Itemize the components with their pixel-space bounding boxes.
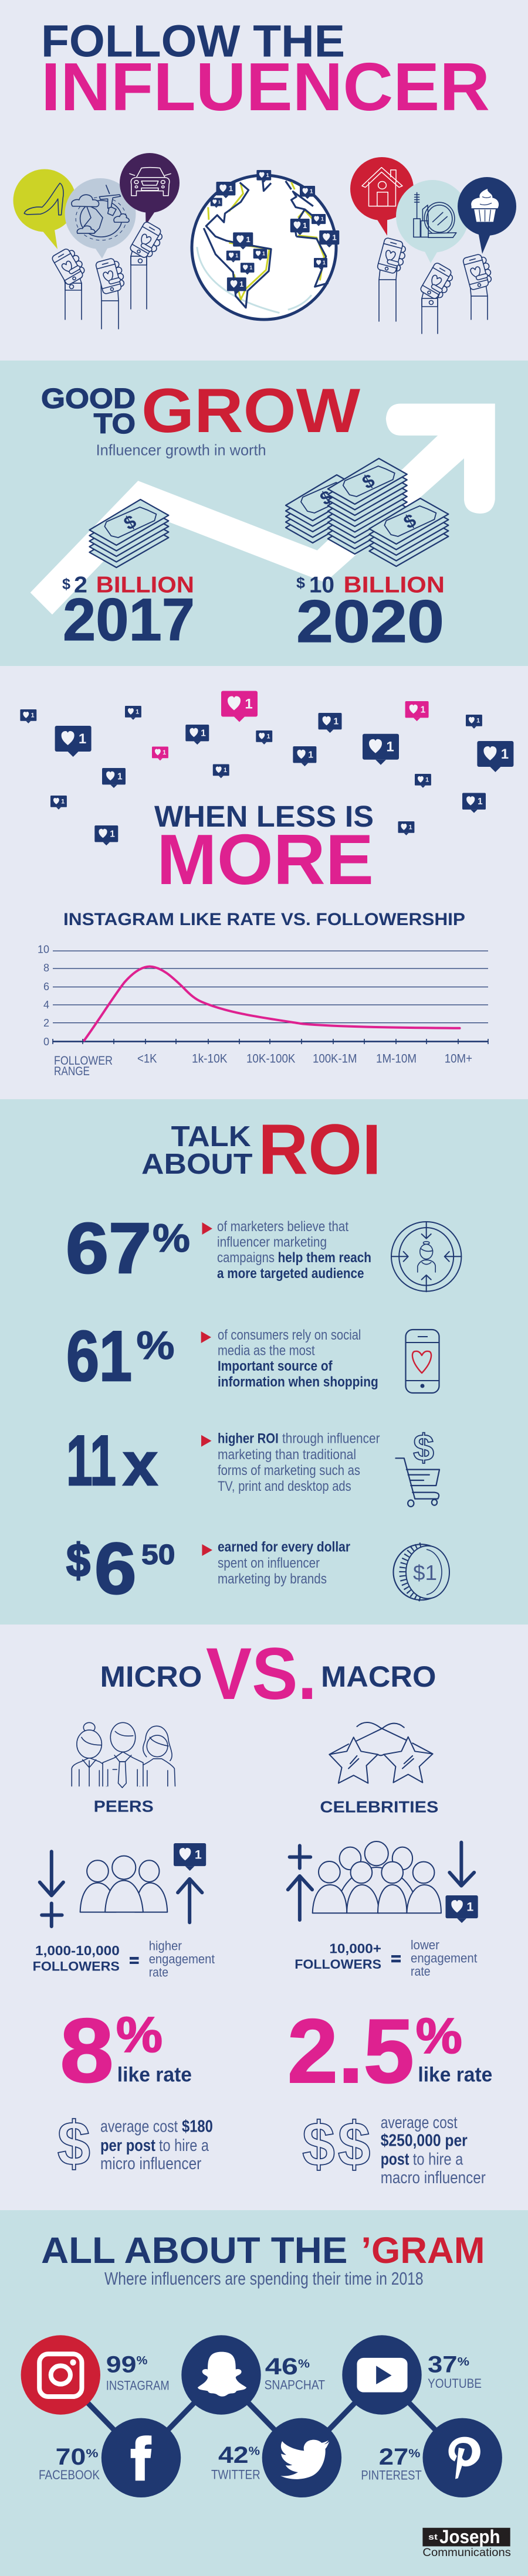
stat: pinterest: PINTEREST bbox=[361, 2468, 422, 2483]
like badge: 1 bbox=[266, 172, 270, 179]
stat: $6.50 bbox=[66, 1528, 350, 1609]
stat: 2020: BILLION bbox=[344, 573, 445, 598]
title bbox=[41, 16, 490, 125]
line chart bbox=[38, 943, 488, 1078]
like badge bbox=[415, 774, 431, 788]
icon: dollar signs: $ bbox=[302, 2109, 335, 2179]
hand 2 bbox=[95, 257, 127, 329]
like badge: 1 bbox=[249, 265, 252, 271]
heading: all about the gram: ALL ABOUT THE bbox=[41, 2230, 347, 2271]
like badge: 1 bbox=[117, 772, 123, 781]
like badge bbox=[241, 263, 254, 274]
like badge: 1 bbox=[310, 189, 313, 195]
like badge bbox=[256, 170, 271, 182]
chart title: INSTAGRAM LIKE RATE VS. FOLLOWERSHIP bbox=[63, 910, 465, 929]
icon: macro crowd bbox=[288, 1841, 478, 1923]
icon: youtube bbox=[342, 2335, 422, 2415]
panel: good to grow bbox=[31, 375, 495, 655]
like badge: 1 bbox=[266, 733, 270, 740]
heading: all about the gram bbox=[41, 2230, 485, 2271]
stat: 61%: Important source of bbox=[218, 1358, 333, 1374]
title: INFLUENCER bbox=[41, 49, 490, 125]
icon: peers bbox=[72, 1722, 175, 1787]
stat: $6.50: 50 bbox=[141, 1540, 175, 1571]
heading: talk about ROI: TALK bbox=[171, 1121, 251, 1153]
like badge bbox=[312, 214, 326, 226]
stat: 67% bbox=[66, 1208, 371, 1288]
money stack right bbox=[369, 498, 448, 566]
stat: macro followers bbox=[295, 1938, 477, 1979]
hand 3 bbox=[129, 221, 166, 309]
floating like badges bbox=[20, 691, 513, 845]
stat: micro followers: 1,000-10,000 bbox=[35, 1943, 120, 1958]
stat: instagram: % bbox=[136, 2354, 148, 2367]
icon: twitter bbox=[262, 2418, 341, 2497]
like badge bbox=[319, 230, 339, 247]
like badge bbox=[398, 821, 414, 835]
stat: 61% bbox=[66, 1316, 378, 1396]
like badge bbox=[227, 277, 246, 294]
bubble: makeup bbox=[396, 180, 469, 263]
stat: 61%: of consumers rely on social bbox=[218, 1327, 361, 1343]
like badge bbox=[226, 251, 240, 263]
money stack centre bbox=[328, 458, 407, 554]
like badge pink bbox=[405, 701, 429, 721]
like badge pink: 1 bbox=[163, 749, 166, 756]
stat: macro followers: FOLLOWERS bbox=[295, 1957, 381, 1972]
like badge: 1 bbox=[332, 233, 337, 242]
cost: micro: average cost bbox=[100, 2118, 178, 2136]
stat: 11x: higher ROI bbox=[218, 1431, 279, 1447]
stat: 67%: of marketers believe that bbox=[217, 1219, 348, 1235]
stat: twitter: % bbox=[249, 2445, 260, 2458]
y axis labels: 4 bbox=[43, 999, 49, 1011]
stat: 11x: x bbox=[123, 1430, 158, 1498]
like badge: 1 bbox=[110, 829, 115, 839]
x axis labels: RANGE bbox=[54, 1065, 90, 1078]
stat: 11x: forms of marketing such as bbox=[218, 1463, 360, 1479]
stat: micro followers: FOLLOWERS bbox=[33, 1959, 120, 1974]
globe like badges bbox=[211, 170, 339, 294]
stat: 8% like rate bbox=[60, 2000, 192, 2101]
stat: $6.50: spent on influencer bbox=[218, 1555, 320, 1571]
like badge bbox=[94, 825, 118, 845]
stat: youtube: % bbox=[458, 2356, 469, 2368]
stat: 2017: 2 bbox=[74, 573, 87, 598]
icon: dollar coin: $1 bbox=[413, 1561, 437, 1585]
like badge bbox=[446, 1895, 478, 1923]
money stack 2017 bbox=[89, 499, 168, 567]
stat: pinterest: 27 bbox=[379, 2444, 408, 2470]
stat: 8% like rate: like rate bbox=[117, 2064, 192, 2086]
y axis labels: 0 bbox=[43, 1036, 49, 1048]
stat: 2020: $ bbox=[296, 574, 306, 592]
cost: macro: macro influencer bbox=[381, 2169, 486, 2187]
logo: st joseph communications bbox=[422, 2526, 511, 2559]
money stack centre: $ bbox=[358, 470, 378, 493]
stat: $6.50: marketing by brands bbox=[218, 1571, 327, 1587]
panel: talk about ROI bbox=[66, 1110, 461, 1609]
stat: instagram: 99 bbox=[106, 2352, 136, 2378]
like badge: 1 bbox=[79, 731, 86, 747]
icon: dollar sign: $ bbox=[57, 2108, 90, 2179]
like badge bbox=[363, 734, 399, 765]
title: FOLLOW THE bbox=[41, 16, 345, 67]
stat: $6.50: earned for every dollar bbox=[218, 1540, 350, 1555]
stat: 2020: 2020 bbox=[296, 588, 444, 655]
y axis labels: 6 bbox=[43, 981, 49, 993]
network connectors bbox=[60, 2375, 462, 2458]
like badge bbox=[253, 249, 267, 260]
stat: 11x: marketing than traditional bbox=[218, 1447, 356, 1463]
heading: good to grow: GROW bbox=[141, 375, 360, 446]
stat: snapchat: SNAPCHAT bbox=[265, 2378, 325, 2393]
stat: micro followers: higher bbox=[149, 1939, 182, 1953]
stat: 2.5% like rate: % bbox=[416, 2009, 462, 2064]
panel: when less is more bbox=[20, 691, 513, 1078]
like badge: 1 bbox=[386, 739, 394, 755]
like badge bbox=[318, 713, 341, 733]
icon: facebook bbox=[101, 2418, 181, 2497]
like badge: 1 bbox=[262, 251, 265, 257]
y axis labels: 8 bbox=[43, 962, 49, 974]
label: peers: PEERS bbox=[94, 1797, 154, 1816]
like badge: 1 bbox=[303, 221, 307, 230]
like badge pink bbox=[221, 691, 258, 722]
money stack right: $ bbox=[400, 509, 419, 533]
logo: st joseph communications: st bbox=[428, 2532, 438, 2541]
icon: celebrities bbox=[329, 1722, 433, 1783]
like badge: 1 bbox=[201, 728, 206, 738]
label: celebrities: CELEBRITIES bbox=[320, 1798, 438, 1816]
icon: snapchat bbox=[181, 2335, 261, 2415]
cost: micro bbox=[57, 2108, 213, 2179]
stat: pinterest bbox=[361, 2444, 422, 2483]
stat: 8% like rate: % bbox=[116, 2007, 163, 2063]
stat: facebook: 70 bbox=[56, 2444, 86, 2470]
stat: 8% like rate: 8 bbox=[60, 2000, 114, 2101]
growth arrow bbox=[31, 403, 495, 614]
stat: facebook bbox=[39, 2444, 100, 2482]
x axis labels: 1M-10M bbox=[376, 1052, 417, 1066]
like badge: 1 bbox=[239, 280, 243, 288]
speech bubbles bbox=[13, 153, 516, 263]
stat: twitter bbox=[211, 2442, 260, 2482]
stat: macro followers: rate bbox=[411, 1964, 431, 1979]
stat: youtube: YOUTUBE bbox=[428, 2376, 482, 2391]
stat: 11x: 11 bbox=[66, 1420, 116, 1500]
like badge: 1 bbox=[323, 260, 326, 266]
icon: dollar signs: $ bbox=[338, 2109, 371, 2179]
money stack back bbox=[286, 475, 365, 543]
x axis labels: 10K-100K bbox=[246, 1052, 295, 1066]
like badge bbox=[50, 796, 67, 810]
hands holding phones bbox=[51, 221, 494, 334]
stat: 2.5% like rate: 2.5 bbox=[287, 2000, 414, 2102]
stat: 61%: % bbox=[136, 1323, 175, 1368]
stat: 67%: campaigns bbox=[217, 1250, 275, 1266]
hand 1 bbox=[51, 246, 88, 320]
cost: macro: to hire a bbox=[413, 2150, 463, 2169]
like badge bbox=[462, 793, 486, 813]
stat: macro followers: engagement bbox=[411, 1950, 477, 1965]
stat: youtube bbox=[428, 2352, 482, 2391]
logo: st joseph communications: Joseph bbox=[439, 2526, 500, 2547]
like badge pink: 1 bbox=[421, 705, 426, 715]
heading: micro vs macro bbox=[100, 1633, 436, 1715]
logo: st joseph communications: Communications bbox=[422, 2547, 511, 2559]
icon: phone with heart bbox=[406, 1330, 439, 1393]
stat: 67%: influencer marketing bbox=[217, 1235, 327, 1250]
stat: snapchat: 46 bbox=[265, 2354, 298, 2380]
stat: twitter: 42 bbox=[218, 2442, 249, 2468]
like badge: 1 bbox=[321, 216, 324, 222]
heading: micro vs macro: VS. bbox=[206, 1633, 317, 1715]
icon: target audience bbox=[391, 1222, 461, 1292]
heading: talk about ROI: ROI bbox=[258, 1110, 381, 1190]
like badge bbox=[213, 764, 229, 778]
like badge pink: 1 bbox=[245, 696, 253, 712]
heading: micro vs macro: MACRO bbox=[321, 1660, 436, 1693]
stat: instagram bbox=[106, 2352, 170, 2393]
heading: good to grow bbox=[41, 375, 360, 446]
cost: micro: per post bbox=[100, 2136, 155, 2155]
icon: shopping cart: $ bbox=[413, 1426, 434, 1469]
y axis labels bbox=[38, 943, 49, 1048]
stat: youtube: 37 bbox=[428, 2352, 458, 2378]
heading: good to grow: GOOD bbox=[41, 383, 136, 414]
icon: dollar coin bbox=[393, 1544, 449, 1600]
subheading: Influencer growth in worth bbox=[96, 441, 266, 458]
panel: all about the gram bbox=[21, 2230, 511, 2559]
money stack 2017: $ bbox=[120, 511, 140, 534]
like badge bbox=[466, 715, 482, 729]
x axis labels: FOLLOWER bbox=[54, 1054, 113, 1068]
cost: macro bbox=[302, 2109, 486, 2187]
heading: good to grow: TO bbox=[94, 409, 136, 440]
cost: micro: $180 bbox=[182, 2118, 213, 2136]
like badge: 1 bbox=[218, 199, 221, 205]
subheading: Where influencers are spending their time in 2018 bbox=[104, 2268, 424, 2289]
globe bbox=[192, 175, 336, 320]
like badge: 1 bbox=[478, 797, 483, 807]
stat: 2.5% like rate bbox=[287, 2000, 492, 2102]
icon: dollar signs bbox=[302, 2109, 371, 2179]
like badge bbox=[256, 730, 272, 745]
like badge: 1 bbox=[224, 767, 227, 774]
stat: $6.50: $ bbox=[66, 1534, 90, 1586]
stat: 2.5% like rate: like rate bbox=[418, 2064, 492, 2086]
heading: all about the gram: ’GRAM bbox=[361, 2230, 485, 2271]
bubble: shoe bbox=[13, 169, 76, 249]
stat: 11x: through influencer bbox=[282, 1431, 380, 1447]
heading: talk about ROI: ABOUT bbox=[141, 1148, 253, 1180]
money stack back: $ bbox=[316, 486, 336, 509]
like badge bbox=[300, 186, 315, 199]
like badge bbox=[174, 1843, 206, 1871]
y axis labels: 10 bbox=[38, 943, 49, 955]
x axis labels bbox=[54, 1052, 472, 1078]
stat: 67%: a more targeted audience bbox=[217, 1266, 364, 1282]
stat: micro followers bbox=[33, 1939, 215, 1980]
heading: when less is more: MORE bbox=[157, 820, 374, 899]
like badge: 1 bbox=[61, 798, 65, 805]
like badge bbox=[185, 725, 209, 745]
like badge: 1 bbox=[476, 718, 480, 724]
stat: 67%: 67 bbox=[66, 1208, 151, 1288]
stat: instagram: INSTAGRAM bbox=[106, 2378, 170, 2393]
like badge bbox=[290, 219, 310, 235]
like badge: 1 bbox=[308, 750, 313, 760]
heading: when less is more: WHEN LESS IS bbox=[154, 800, 374, 833]
stat: macro followers: lower bbox=[411, 1938, 439, 1952]
like badge: 1 bbox=[466, 1900, 473, 1914]
stat: 61%: media as the most bbox=[218, 1343, 315, 1359]
like badge bbox=[55, 726, 92, 757]
y axis labels: 2 bbox=[43, 1017, 49, 1029]
hand 6 bbox=[462, 253, 494, 320]
stat: 67%: help them reach bbox=[278, 1250, 371, 1266]
like badge bbox=[293, 746, 316, 766]
like badge bbox=[477, 741, 513, 772]
stat: 11x bbox=[66, 1420, 380, 1500]
like badge: 1 bbox=[31, 712, 35, 719]
like badge bbox=[233, 232, 253, 250]
like badge: 1 bbox=[409, 824, 412, 831]
like badge: 1 bbox=[195, 1848, 202, 1862]
stat: snapchat bbox=[265, 2354, 325, 2393]
icon: micro crowd bbox=[40, 1843, 206, 1926]
like badge: 1 bbox=[334, 716, 339, 726]
stat: 2017: BILLION bbox=[96, 573, 194, 598]
like badge bbox=[314, 258, 327, 270]
panel: micro vs macro bbox=[33, 1633, 492, 2187]
stat: snapchat: % bbox=[298, 2358, 310, 2371]
icon: shopping cart bbox=[395, 1426, 439, 1507]
stat: twitter: TWITTER bbox=[211, 2467, 260, 2482]
bubble: car bbox=[120, 153, 180, 225]
like badge bbox=[125, 706, 141, 720]
stat: micro followers: rate bbox=[149, 1965, 168, 1980]
x axis labels: <1K bbox=[137, 1052, 157, 1066]
stat: 11x: TV, print and desktop ads bbox=[218, 1479, 351, 1494]
cost: micro: to hire a bbox=[159, 2136, 209, 2155]
like badge: 1 bbox=[229, 184, 233, 193]
icon: instagram bbox=[21, 2335, 100, 2415]
bubble: house bbox=[350, 157, 414, 236]
stat: 61%: information when shopping bbox=[218, 1374, 378, 1390]
heading: talk about ROI bbox=[141, 1110, 381, 1190]
hand 5 bbox=[419, 262, 456, 334]
cost: macro: average cost bbox=[381, 2113, 458, 2132]
stat: 61%: 61 bbox=[66, 1316, 132, 1396]
stat: $6.50: 6 bbox=[94, 1528, 136, 1609]
stat: facebook: % bbox=[86, 2447, 99, 2460]
x axis labels: 100K-1M bbox=[313, 1052, 357, 1066]
icon: pinterest bbox=[422, 2418, 502, 2497]
stat: pinterest: % bbox=[408, 2447, 421, 2460]
like badge: 1 bbox=[136, 709, 139, 715]
like badge bbox=[20, 709, 36, 723]
like badge bbox=[211, 198, 222, 208]
stat: micro followers: engagement bbox=[149, 1952, 215, 1966]
like badge: 1 bbox=[246, 235, 251, 244]
stat: 67%: % bbox=[153, 1216, 190, 1260]
stat: macro followers: 10,000+ bbox=[329, 1941, 381, 1956]
bubble: travel bbox=[65, 178, 136, 259]
cost: micro: micro influencer bbox=[100, 2154, 202, 2173]
cost: macro: post bbox=[381, 2150, 409, 2169]
like badge: 1 bbox=[235, 253, 238, 259]
like badge: 1 bbox=[501, 746, 509, 762]
like badge pink bbox=[152, 747, 168, 760]
like badge bbox=[216, 182, 235, 198]
hand 4 bbox=[377, 237, 408, 321]
stat: 2020: 10 bbox=[309, 573, 334, 598]
stat: 2017: $ bbox=[62, 575, 71, 593]
like badge: 1 bbox=[425, 777, 429, 783]
stat: 2017: 2017 bbox=[63, 586, 195, 653]
cost: macro: $250,000 per bbox=[381, 2132, 468, 2150]
stat: facebook: FACEBOOK bbox=[39, 2468, 100, 2482]
bubble: cupcake bbox=[458, 177, 516, 254]
x axis labels: 1k-10K bbox=[192, 1052, 228, 1066]
x axis labels: 10M+ bbox=[445, 1052, 472, 1066]
like badge bbox=[102, 768, 126, 788]
heading: micro vs macro: MICRO bbox=[100, 1660, 202, 1693]
